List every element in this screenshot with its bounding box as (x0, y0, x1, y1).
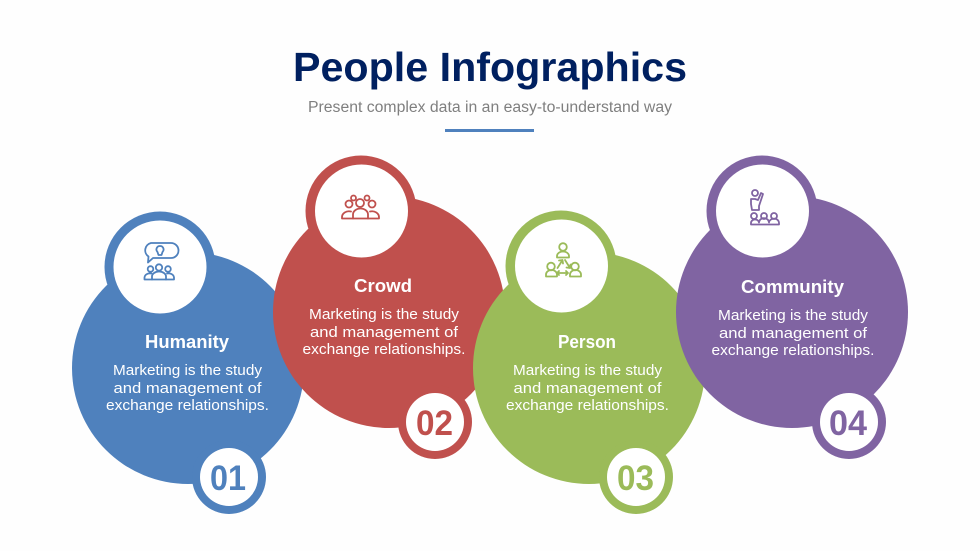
icon: speech bubble over people (144, 243, 179, 280)
badge: 03: 03 (617, 459, 654, 498)
text block: crowd: Marketing is the study (309, 306, 460, 323)
text block: community: exchange relationships. (712, 342, 874, 359)
icon: speaker and audience (751, 190, 779, 224)
icon: person network (546, 243, 581, 276)
heading: Humanity: Humanity (145, 332, 229, 352)
panel: crowd (273, 156, 505, 459)
text block: person: Marketing is the study (513, 362, 663, 379)
text block: community: and management of (719, 325, 868, 342)
badge: 02 (398, 385, 472, 459)
text block: community (712, 307, 874, 359)
text block: person: exchange relationships. (506, 397, 669, 414)
badge: 02: 02 (416, 404, 453, 443)
text block: crowd: exchange relationships. (302, 341, 466, 358)
text block: humanity: and management of (114, 380, 262, 397)
icon: crowd (342, 196, 379, 218)
heading: Crowd: Crowd (354, 276, 412, 296)
badge: 01 (192, 440, 266, 514)
title: People Infographics (293, 44, 687, 90)
panel: person (473, 210, 705, 514)
subtitle: Present complex data in an easy-to-understand way (308, 99, 672, 116)
heading: Person: Person (558, 332, 616, 352)
text block: crowd: and management of (310, 324, 459, 341)
text block: humanity: Marketing is the study (113, 362, 263, 379)
panel: humanity (72, 212, 304, 514)
title underline (445, 129, 534, 132)
badge: 04 (812, 385, 886, 459)
text block: crowd (302, 306, 466, 358)
badge: 03 (599, 440, 673, 514)
text block: humanity (106, 362, 269, 414)
panel: community (676, 156, 908, 459)
heading: Community: Community (741, 277, 844, 297)
badge: 01: 01 (210, 459, 246, 498)
badge: 04: 04 (829, 404, 868, 443)
text block: humanity: exchange relationships. (106, 397, 269, 414)
text block: person (506, 362, 669, 414)
text block: community: Marketing is the study (718, 307, 869, 324)
text block: person: and management of (514, 380, 662, 397)
